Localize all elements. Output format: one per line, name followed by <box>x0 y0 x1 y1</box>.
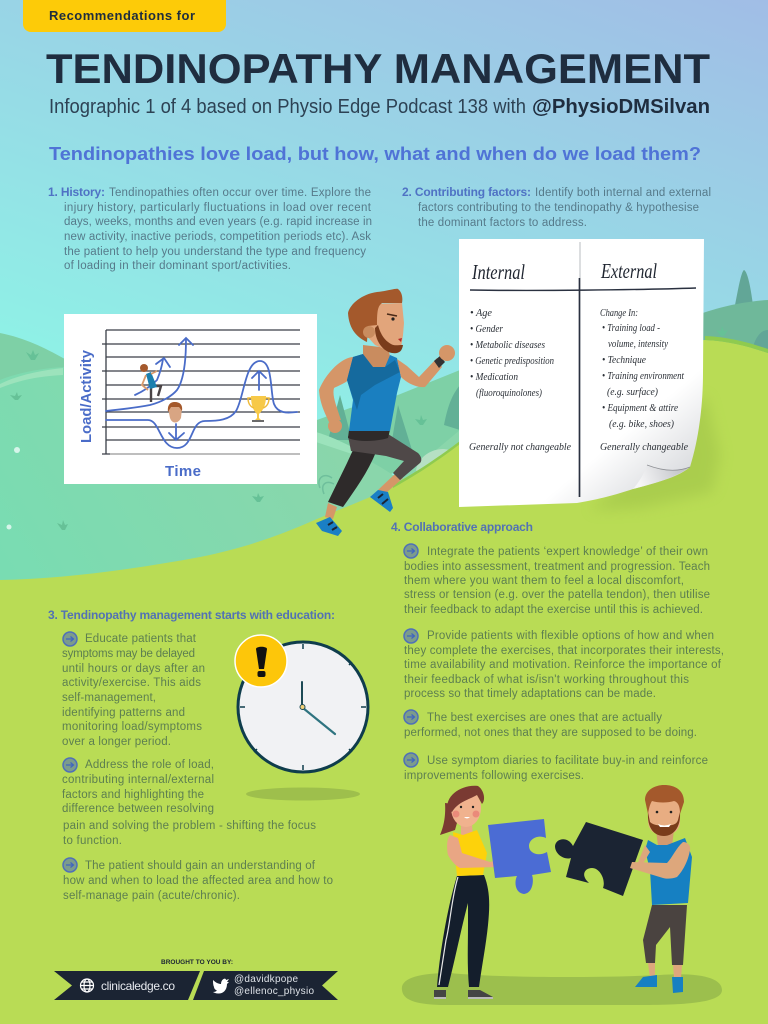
section 1: history: new activity, inactive periods, competition periods etc). Ask <box>64 231 371 243</box>
runner tank shading <box>347 354 400 410</box>
dark puzzle piece <box>555 822 643 896</box>
footer ribbon: twitter: @davidkpope <box>234 974 298 985</box>
section 2: contributing factors <box>402 185 711 229</box>
woman ponytail <box>440 803 462 835</box>
bullet icon <box>63 632 77 646</box>
section 1: history: injury history, particularly fluctuations in load over recent <box>64 202 372 214</box>
footer ribbon: website: clinicaledge.co <box>101 979 175 993</box>
section 4: collaborative approach: bodies into assessment, treatment and progression. Teach <box>404 561 710 573</box>
chart axis label: load: Load/Activity <box>78 349 95 443</box>
twitter bird icon <box>213 979 229 994</box>
internal column: Internal <box>471 260 525 284</box>
man neck <box>656 830 674 846</box>
section 4: collaborative approach: Integrate the patients ‘expert knowledge’ of their own <box>427 546 708 558</box>
runner wristband <box>434 356 445 368</box>
external column: • Technique <box>602 355 647 366</box>
internal column: • Gender <box>470 324 503 335</box>
section 1: history <box>48 185 372 272</box>
man head <box>645 785 684 836</box>
section 3: education: to function. <box>63 835 122 847</box>
section 4: collaborative approach: process so that timely adaptations can be made. <box>404 688 656 700</box>
bullet icon <box>404 710 418 724</box>
section 4: collaborative approach: 4. Collaborative approach <box>391 520 533 534</box>
man <box>630 785 692 993</box>
footer credit label: BROUGHT TO YOU BY: <box>161 959 233 966</box>
runner front ankle <box>378 473 403 493</box>
section 4: collaborative approach: Provide patients with flexible options of how and when <box>427 630 714 642</box>
clock illustration <box>235 635 368 800</box>
internal column: • Genetic predisposition <box>470 356 554 367</box>
runner illustration <box>316 289 455 536</box>
section 3: education: 3. Tendinopathy management starts with education: <box>48 608 335 622</box>
paper: internal and external factors <box>459 239 704 507</box>
runner front arm <box>397 358 442 387</box>
ground shadow <box>402 973 722 1005</box>
woman top <box>453 830 487 876</box>
clock hands <box>300 682 335 734</box>
external column: volume, intensity <box>608 339 668 350</box>
bullet icon <box>404 629 418 643</box>
man arm <box>630 842 690 879</box>
section 3: education: how and when to load the affected area and how to <box>63 875 333 887</box>
woman <box>434 786 497 999</box>
chart curves and arrows <box>106 338 297 448</box>
section 4: collaborative approach: improvements following exercises. <box>404 770 584 782</box>
chart icon: head <box>168 402 182 422</box>
section 4: collaborative approach: stress or tension (e.g. over the patella tendon), then utilise <box>404 589 710 601</box>
couple with puzzle illustration <box>402 785 722 1005</box>
chart: load over time <box>64 314 317 484</box>
paper shadow <box>590 395 720 510</box>
section 3: education: until hours or days after an <box>62 663 205 675</box>
header tab <box>23 0 226 32</box>
runner back shoe <box>316 517 342 536</box>
internal column: • Age <box>470 308 493 319</box>
runner back hand <box>328 419 342 433</box>
runner front shoe <box>370 490 393 512</box>
section 4: collaborative approach <box>391 520 724 782</box>
section 2: contributing factors: Identify both internal and external <box>535 187 711 199</box>
clock shadow <box>246 788 360 800</box>
internal column: • Medication <box>470 372 518 383</box>
section 3: education: Educate patients that <box>85 633 197 645</box>
chart icon: trophy <box>248 396 269 422</box>
section 4: collaborative approach: time availability and motivation. Reinforce the importance of <box>404 659 722 671</box>
section 3: education: symptoms may be delayed <box>62 648 195 660</box>
footer ribbon: website <box>54 971 200 1000</box>
man shoes <box>635 975 683 993</box>
woman arm <box>447 835 497 868</box>
runner head <box>348 289 404 353</box>
woman legging stripe <box>439 877 458 985</box>
section 2: contributing factors: 2. Contributing factors: <box>402 185 531 199</box>
runner motion lines <box>319 476 334 494</box>
runner front leg <box>348 434 421 480</box>
bullet icon <box>63 758 77 772</box>
man tank top <box>645 838 692 905</box>
header tab: Recommendations for <box>49 8 195 23</box>
internal column: • Metabolic diseases <box>470 340 545 351</box>
runner back arm <box>319 357 353 422</box>
chart axis label: time: Time <box>165 463 201 480</box>
section 3: education <box>48 608 335 902</box>
man legs <box>643 905 687 965</box>
subtitle: @PhysioDMSilvan <box>532 96 710 118</box>
clock face <box>238 642 368 772</box>
section 4: collaborative approach: them where you want them to feel a local discomfort, <box>404 575 684 587</box>
runner waistband <box>348 430 390 441</box>
woman leggings <box>437 875 489 987</box>
man calves <box>648 963 682 978</box>
section 1: history: Tendinopathies often occur over time. Explore the <box>109 187 371 199</box>
bullet icon <box>63 858 77 872</box>
blue puzzle piece <box>488 819 551 894</box>
external column: Change In: <box>600 308 638 319</box>
runner back leg <box>328 450 376 507</box>
section 3: education: over a longer period. <box>62 736 171 748</box>
section 4: collaborative approach: their feedback of what is/isn't working throughout this <box>404 674 689 686</box>
section 1: history: of loading in their dominant sport/activities. <box>64 260 291 272</box>
runner fist <box>439 345 455 361</box>
section 3: education: self-manage pain (acute/chronic). <box>63 890 240 902</box>
external column: Generally changeable <box>600 442 689 453</box>
internal column: Generally not changeable <box>469 442 572 453</box>
section 3: education: Address the role of load, <box>85 759 214 771</box>
external column: (e.g. bike, shoes) <box>609 419 675 430</box>
background hills <box>0 270 768 1024</box>
section 1: history: 1. History: <box>48 185 105 199</box>
bullet icon <box>404 544 418 558</box>
external column: External <box>600 259 657 283</box>
section 2: contributing factors: the dominant factors to address. <box>418 217 587 229</box>
sprouts <box>10 326 728 530</box>
section 1: history: the patient to help you understand the type and frequency <box>64 246 366 258</box>
section 4: collaborative approach: they complete the exercises, that incorporates their interests, <box>404 645 724 657</box>
section 3: education: factors and highlighting the <box>62 789 204 801</box>
section 3: education: difference between resolving <box>62 803 214 815</box>
globe icon <box>80 979 94 992</box>
external column: • Training environment <box>602 371 684 382</box>
chart icon: runner <box>140 364 161 402</box>
woman head <box>447 786 484 827</box>
internal column <box>469 260 572 453</box>
bullet icon <box>404 753 418 767</box>
external column: • Training load - <box>602 323 660 334</box>
section 4: collaborative approach: The best exercises are ones that are actually <box>427 712 662 724</box>
section 4: collaborative approach: their feedback to adapt the exercise until this is achieved. <box>404 604 703 616</box>
section 1: history: days, weeks, months and even years (e.g. rapid increase in <box>64 216 372 228</box>
section 3: education: activity/exercise. This aids <box>62 677 201 689</box>
footer ribbon: twitter: @ellenoc_physio <box>234 986 314 997</box>
woman shoes <box>434 990 493 999</box>
section 2: contributing factors: factors contributing to the tendinopathy & hypothesise <box>418 202 699 214</box>
external column: • Equipment & attire <box>602 403 679 414</box>
external column <box>600 259 689 453</box>
external column: (e.g. surface) <box>607 387 659 398</box>
man left arm <box>637 845 650 867</box>
section 3: education: pain and solving the problem - shifting the focus <box>63 820 316 832</box>
section 3: education: monitoring load/symptoms <box>62 721 202 733</box>
woman neck <box>461 824 473 836</box>
internal column: (fluoroquinolones) <box>476 388 543 399</box>
footer ribbon: twitter <box>193 971 338 1000</box>
section 4: collaborative approach: performed, not ones that they are supposed to be doing. <box>404 727 697 739</box>
section 3: education: contributing internal/external <box>62 774 214 786</box>
section 3: education: identifying patterns and <box>62 707 185 719</box>
runner neck <box>363 345 390 369</box>
section 4: collaborative approach: Use symptom diaries to facilitate buy-in and reinforce <box>427 755 708 767</box>
title: TENDINOPATHY MANAGEMENT <box>46 45 710 92</box>
runner tank top <box>347 354 401 431</box>
runner back ankle <box>325 503 337 519</box>
tagline: Tendinopathies love load, but how, what and when do we load them? <box>49 144 701 164</box>
clock alert badge <box>235 635 287 687</box>
subtitle: Infographic 1 of 4 based on Physio Edge Podcast 138 with <box>49 96 526 118</box>
section 3: education: The patient should gain an understanding of <box>85 860 316 872</box>
section 3: education: self-management, <box>62 692 156 704</box>
